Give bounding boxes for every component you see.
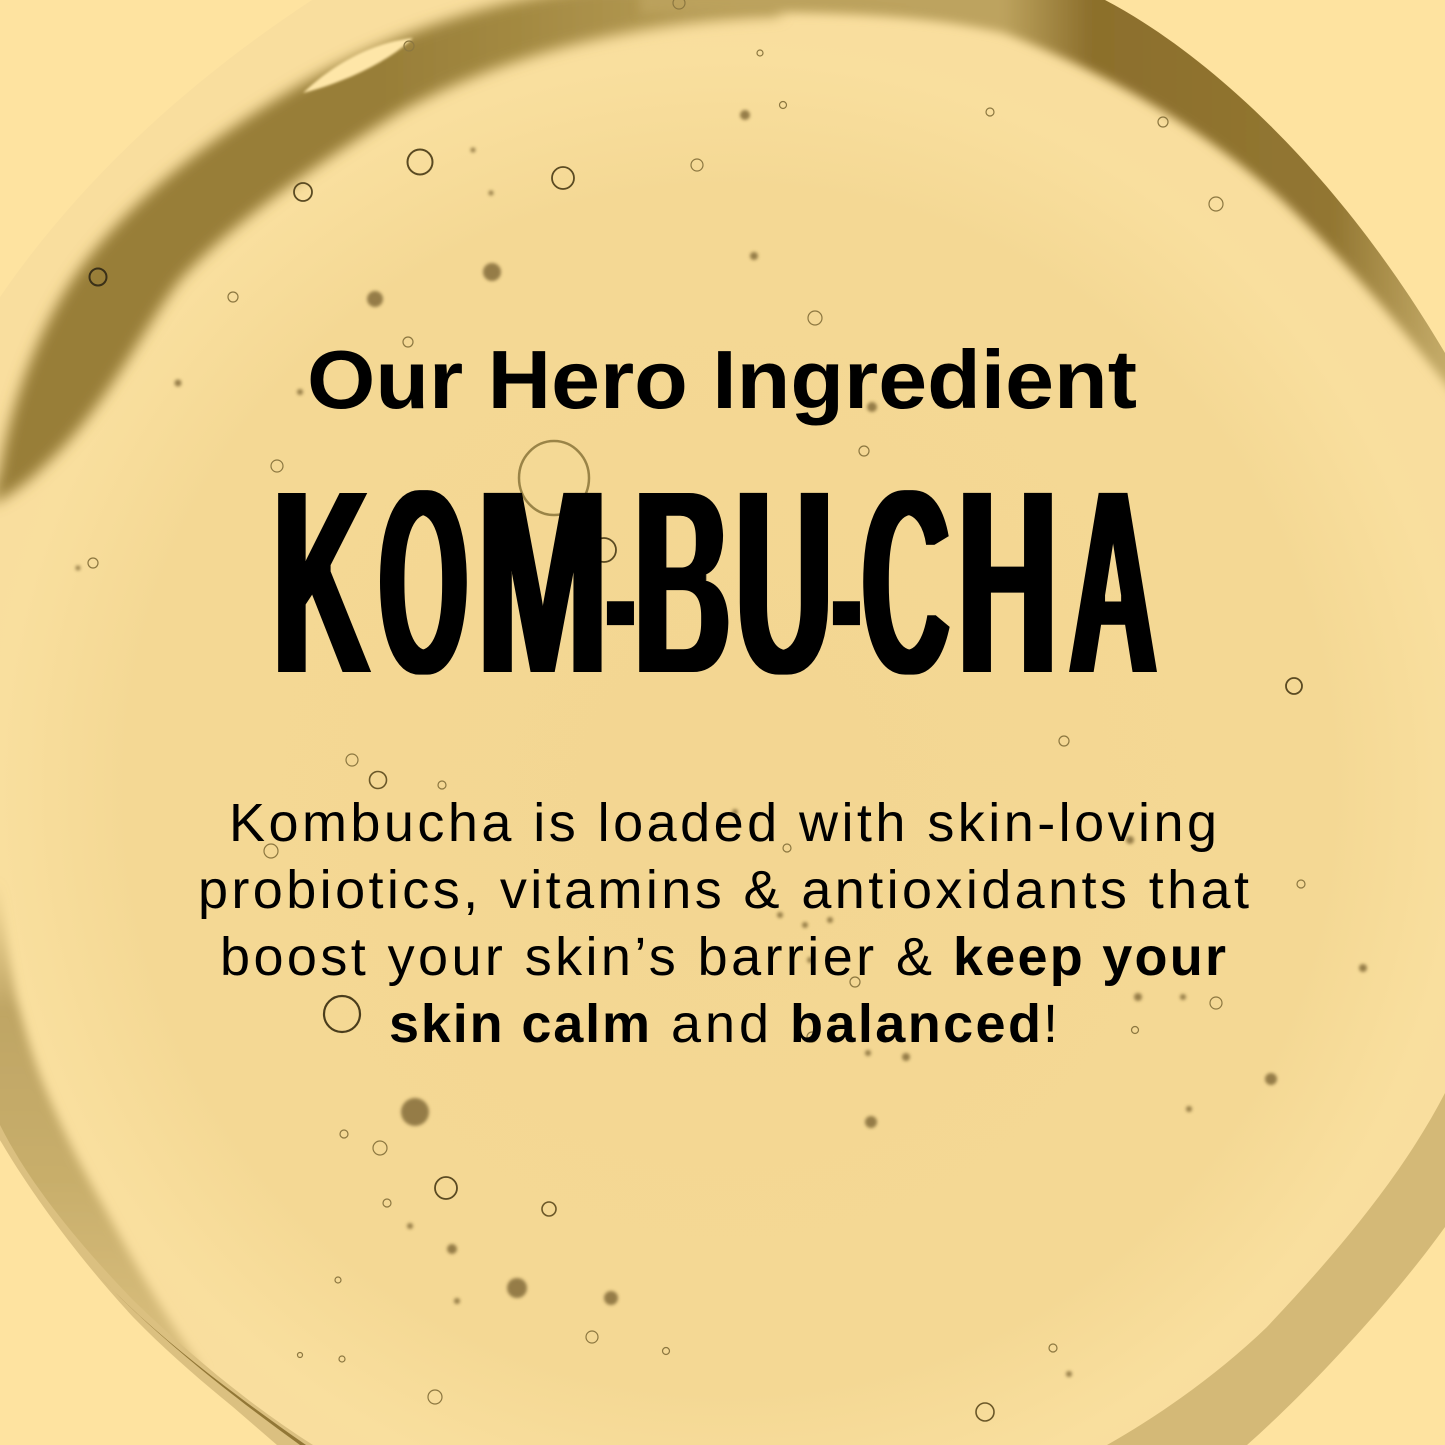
line 3: boost your skin’s barrier & bbox=[220, 927, 932, 987]
headline: KOM-BU-CHA: O bbox=[379, 431, 468, 732]
line 3: keep your bbox=[953, 927, 1226, 987]
drop rim: bottom left band bbox=[0, 880, 205, 1372]
line 4: and bbox=[671, 994, 769, 1054]
line 2: probiotics, vitamins & antioxidants that bbox=[198, 860, 1249, 920]
drop rim: bottom left outer stripe bbox=[0, 1125, 313, 1445]
drop rim: bottom left dark line bbox=[100, 1277, 306, 1445]
line 4: balanced bbox=[790, 994, 1041, 1054]
headline: KOM-BU-CHA: C bbox=[862, 433, 950, 733]
headline: KOM-BU-CHA: - bbox=[608, 453, 633, 732]
heading: Our Hero Ingredient: Our Hero Ingredient bbox=[307, 333, 1137, 426]
headline: KOM-BU-CHA: M bbox=[477, 432, 608, 732]
large bubble behind headline bbox=[519, 441, 589, 515]
headline: KOM-BU-CHA: A bbox=[1069, 433, 1157, 733]
small dark particles bbox=[76, 110, 1367, 1377]
headline: KOM-BU-CHA: H bbox=[958, 433, 1057, 733]
line 1: Kombucha is loaded with skin-loving bbox=[229, 793, 1217, 853]
headline: KOM-BU-CHA: - bbox=[834, 453, 859, 732]
drop rim: bottom right band bbox=[1107, 1093, 1445, 1445]
headline: KOM-BU-CHA bbox=[273, 431, 1157, 733]
drop rim: upper right dark band bbox=[640, 0, 1445, 412]
line 4: ! bbox=[1043, 994, 1058, 1054]
line 4: skin calm bbox=[389, 994, 650, 1054]
headline: KOM-BU-CHA: U bbox=[736, 432, 832, 732]
drop rim: upper left dark band bbox=[0, 0, 780, 505]
body text bbox=[198, 793, 1249, 1054]
headline: KOM-BU-CHA: B bbox=[634, 432, 730, 732]
highlight on rim bbox=[303, 38, 413, 93]
headline: KOM-BU-CHA: K bbox=[273, 432, 371, 733]
